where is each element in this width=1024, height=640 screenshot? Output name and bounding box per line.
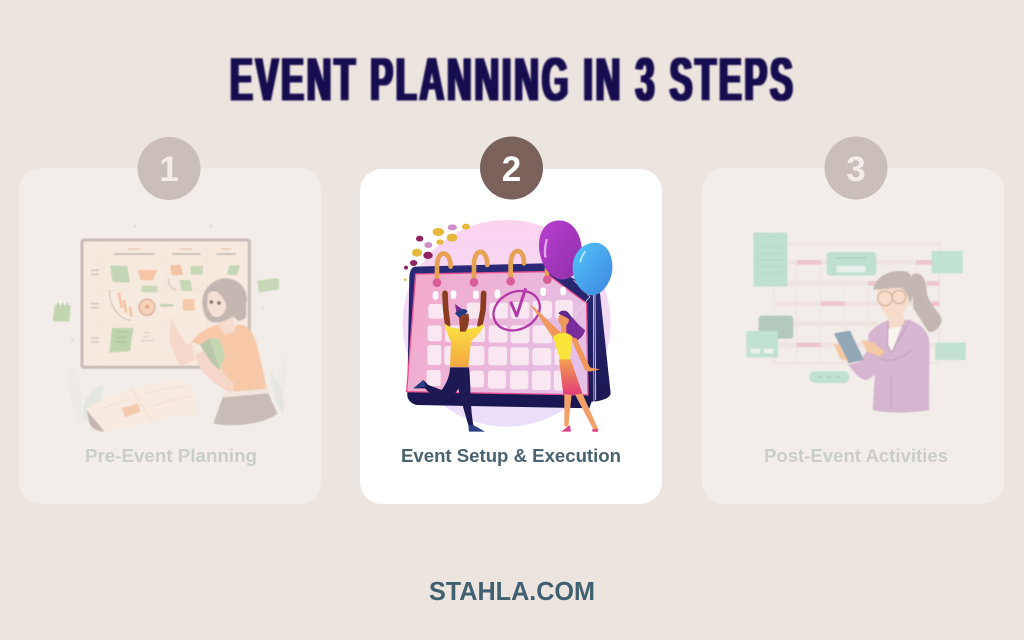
step 3 number badge: 3 [846, 150, 866, 189]
title: EVENT PLANNING IN 3 STEPS [230, 46, 793, 114]
illustration: celebrating at a calendar [403, 220, 612, 432]
step 1 number badge: 1 [159, 150, 179, 189]
confetti dots [404, 224, 470, 281]
footer website: STAHLA.COM [429, 576, 595, 606]
step 2 number badge: 2 [502, 150, 521, 189]
panel: step 2 event setup and execution [360, 136, 662, 504]
step 2 number badge [480, 136, 543, 200]
illustration: woman at planning board [53, 224, 288, 432]
step 3 label: Post-Event Activities [764, 446, 948, 466]
balloons [539, 220, 612, 402]
schedule notes [746, 232, 966, 383]
planning board [82, 240, 249, 367]
man with party hat [413, 293, 485, 432]
side notes [53, 224, 279, 343]
step 2 label: Event Setup & Execution [401, 446, 621, 466]
calendar [407, 251, 611, 408]
open book [87, 381, 198, 432]
panel: step 3 post-event activities [702, 136, 1004, 504]
spiral rings [437, 251, 547, 282]
leaves [69, 353, 288, 423]
pink backdrop circle [403, 220, 611, 427]
woman pointing [530, 305, 600, 432]
date check circle [487, 284, 546, 338]
step 1 label: Pre-Event Planning [85, 446, 257, 466]
panel: step 1 pre-event planning [19, 137, 321, 504]
illustration: woman with tablet and schedule [746, 232, 966, 412]
woman [170, 278, 277, 425]
step 1 number badge [138, 137, 200, 200]
step 3 number badge [824, 136, 888, 200]
schedule grid [774, 244, 939, 363]
woman [833, 271, 942, 412]
